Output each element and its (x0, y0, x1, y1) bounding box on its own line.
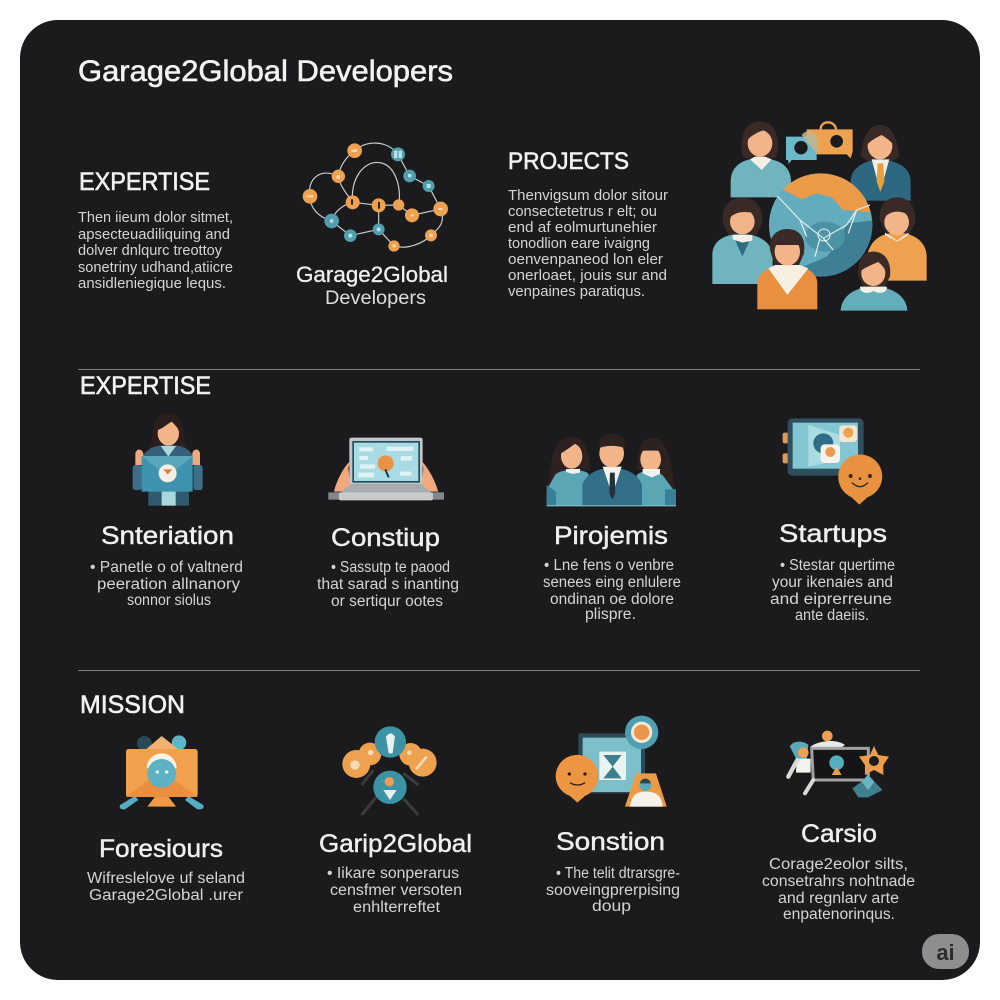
card description: and eiprerreune (770, 591, 892, 608)
text block: projects intro: Thenvigsum dolor sitour (508, 188, 668, 204)
card description: senees eing enlulere (543, 574, 681, 591)
card description: your ikenaies and (772, 574, 893, 591)
card description: • The telit dtrarsgre- (556, 865, 680, 882)
icon: global team around a globe (712, 122, 927, 311)
logo name: Garage2Global (296, 262, 448, 287)
section heading: mission: MISSION (80, 691, 185, 719)
card title: Sonstion (556, 828, 665, 856)
card: pirojemis (543, 433, 681, 623)
badge: ai: ai (936, 940, 955, 965)
badge: ai (922, 934, 969, 969)
person right (868, 197, 927, 281)
card description: Wifreslelove uf seland (87, 870, 245, 887)
card description: ondinan oe dolore (550, 591, 674, 608)
card: garip2global (319, 726, 472, 916)
text block: projects intro: venpaines paratiqus. (508, 284, 645, 300)
icon: speech cases (786, 122, 853, 164)
card description: censfmer versoten (330, 882, 462, 899)
text block: projects intro: consectetetrus r elt; ou (508, 204, 657, 220)
person front centre (757, 229, 817, 309)
card description: ante daeiis. (795, 607, 869, 624)
card description: sooveingprerpising (546, 882, 680, 899)
text block: projects intro: tonodlion eare ivaigng (508, 236, 650, 252)
card title: Pirojemis (554, 522, 668, 550)
card description (762, 856, 915, 923)
card: sonstion (546, 716, 680, 915)
icon: cloud network of nodes (303, 143, 448, 252)
card title: Carsio (801, 820, 877, 848)
heading: projects: PROJECTS (508, 148, 629, 175)
icon: team around a screen with gear (788, 731, 889, 797)
panel: expertise intro (78, 168, 233, 292)
card description: Corage2eolor silts, (769, 856, 908, 873)
icon: team of three (547, 433, 676, 506)
logo subtitle: Developers (325, 288, 426, 309)
card description: consetrahrs nohtnade (762, 873, 915, 890)
card description: • Iikare sonperarus (327, 865, 459, 882)
globe (769, 173, 872, 277)
heading: expertise: EXPERTISE (79, 168, 210, 196)
text block: expertise intro (78, 210, 233, 292)
card title: Startups (779, 520, 887, 548)
card description (90, 559, 243, 609)
card description: • Panetle o of valtnerd (90, 559, 243, 576)
card description: • Lne fens o venbre (544, 557, 674, 574)
card: startups (770, 418, 895, 624)
card description (87, 870, 245, 904)
icon: presenter with envelope (133, 413, 203, 506)
person bottom right (841, 252, 907, 311)
card description: plispre. (585, 606, 636, 623)
card description: or sertiqur ootes (331, 593, 443, 610)
text block: expertise intro: ansidleniegique lequs. (78, 276, 226, 292)
card description: enpatenorinqus. (783, 906, 895, 923)
card: constiup (317, 438, 459, 610)
card description: • Sassutp te paood (331, 559, 450, 576)
card description (546, 865, 680, 915)
card description: Garage2Global .urer (89, 887, 243, 904)
icon: tablet with smiley pin (783, 418, 882, 505)
card description: enhlterreftet (353, 899, 441, 916)
text block: projects intro: end af eolmurtunehier (508, 220, 657, 236)
card description: sonnor siolus (127, 592, 211, 609)
card description: doup (592, 898, 631, 915)
card: carsio (762, 731, 915, 923)
divider rule one (78, 369, 920, 370)
card description: and regnlarv arte (778, 890, 899, 907)
person top right (851, 125, 911, 201)
card description (327, 865, 462, 916)
card title: Garip2Global (319, 830, 472, 858)
title: Garage2Global Developers (78, 55, 453, 88)
text block: projects intro: oenvenpaneod lon eler (508, 252, 663, 268)
text block: expertise intro: apsecteuadiliquing and (78, 227, 230, 243)
card title: Constiup (331, 524, 440, 552)
divider rule two (78, 670, 920, 671)
card description: • Stestar quertime (780, 557, 895, 574)
panel: projects intro (508, 148, 668, 300)
panel: central network logo (296, 143, 448, 309)
icon: panel with smiley, gear and person (556, 716, 667, 807)
card description: that sarad s inanting (317, 576, 459, 593)
card: foresiours (87, 735, 245, 904)
person top left (731, 122, 791, 197)
card description (317, 559, 459, 610)
card title: Foresiours (99, 835, 223, 863)
text block: expertise intro: Then iieum dolor sitmet, (78, 210, 233, 226)
text block: projects intro: onerloaet, jouis sur and (508, 268, 667, 284)
text block: projects intro (508, 188, 668, 300)
text block: expertise intro: dolver dnlqurc treottoy (78, 243, 223, 259)
card: snteriation (90, 413, 243, 609)
card title: Snteriation (101, 522, 234, 550)
icon: laptop held by hands (328, 438, 444, 500)
icon: connected people circles (342, 726, 437, 815)
icon: orange envelope monitor (120, 735, 204, 809)
card description: peeration allnanory (97, 576, 240, 593)
card description (543, 557, 681, 623)
text block: expertise intro: sonetriny udhand,atiicre (78, 260, 233, 276)
card description (770, 557, 895, 624)
person left (712, 198, 773, 284)
section heading: expertise: EXPERTISE (80, 372, 211, 400)
